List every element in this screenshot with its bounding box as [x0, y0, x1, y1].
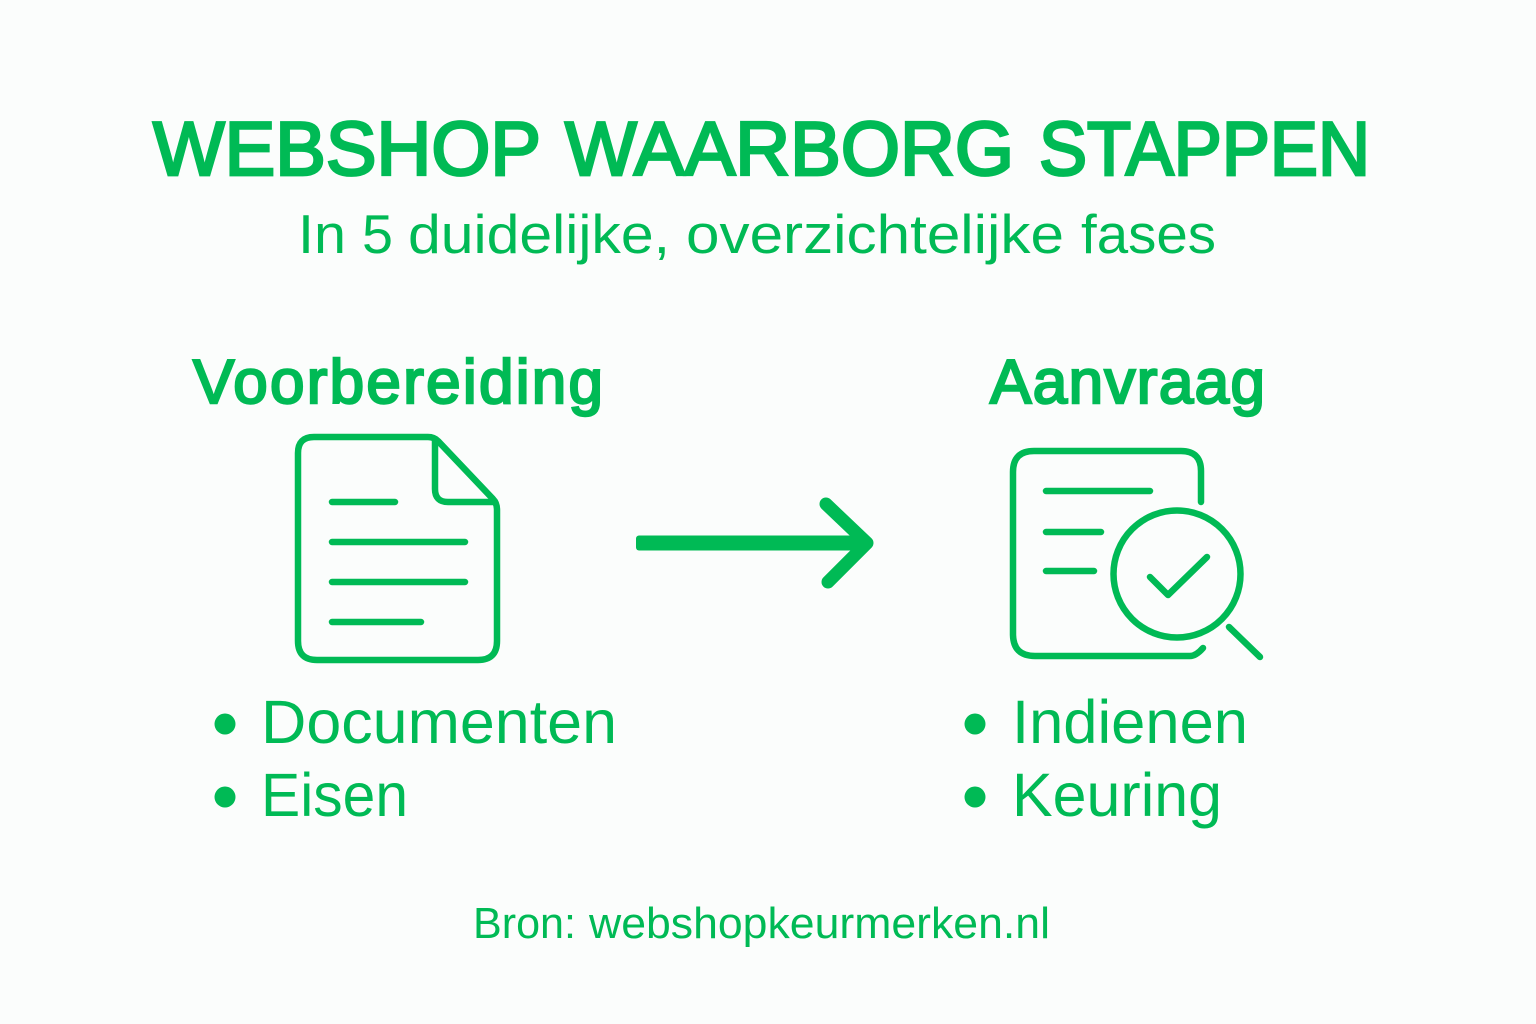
- bullet list: Aanvraag: Indienen: [1012, 688, 1248, 756]
- title: STAPPEN: [1039, 107, 1370, 192]
- title: WEBSHOP: [153, 107, 541, 192]
- title: WAARBORG: [565, 107, 1014, 192]
- bullet list: Voorbereiding: [214, 688, 617, 829]
- subtitle: [298, 203, 1216, 265]
- heading: Aanvraag: Aanvraag: [990, 348, 1265, 417]
- heading: Voorbereiding: Voorbereiding: [193, 348, 603, 417]
- source: Bron:: [473, 899, 576, 948]
- bullet list: Voorbereiding: Documenten: [261, 688, 617, 756]
- bullet list: Aanvraag: Keuring: [1012, 761, 1222, 829]
- icon: document with magnifier and checkmark: [1013, 451, 1260, 657]
- title: [153, 107, 1370, 192]
- subtitle: In: [298, 203, 346, 265]
- subtitle: duidelijke,: [408, 203, 670, 265]
- bullet list: Voorbereiding: Eisen: [261, 761, 408, 829]
- subtitle: overzichtelijke: [686, 203, 1064, 265]
- source: webshopkeurmerken.nl: [588, 899, 1050, 948]
- bullet list: Aanvraag: [964, 688, 1248, 829]
- subtitle: fases: [1081, 203, 1216, 265]
- subtitle: 5: [362, 203, 393, 265]
- arrow: [636, 504, 867, 582]
- icon: document: [298, 437, 497, 660]
